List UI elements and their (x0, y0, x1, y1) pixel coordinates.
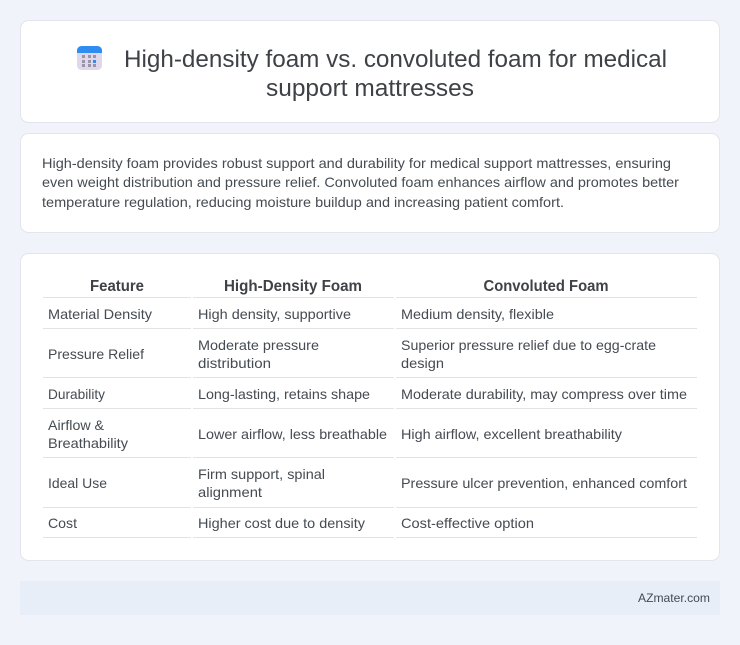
row: pressure relief: Moderate pressure (198, 337, 319, 353)
footer bar (20, 581, 720, 615)
row: cost: Cost (48, 515, 77, 531)
row: ideal use: Pressure ulcer prevention, enhanced comfort (401, 475, 687, 491)
row: pressure relief: distribution (198, 355, 271, 371)
icon: calendar (77, 46, 102, 70)
row: ideal use: Firm support, spinal (198, 466, 325, 482)
title text: support mattresses (266, 75, 474, 102)
row: ideal use: Ideal Use (48, 475, 107, 491)
row: pressure relief (48, 337, 656, 371)
row: pressure relief: Pressure Relief (48, 346, 144, 362)
row: durability: Durability (48, 386, 105, 402)
row: pressure relief: Superior pressure relief due to egg-crate (401, 337, 656, 353)
summary text: even weight distribution and pressure relief. Convoluted foam enhances airflow and promotes better (42, 174, 679, 190)
panel: comparison table (20, 254, 720, 560)
row: airflow and breathability: High airflow, excellent breathability (401, 426, 622, 442)
row: airflow and breathability: Breathability (48, 435, 128, 451)
row: durability: Long-lasting, retains shape (198, 386, 370, 402)
row: airflow and breathability (48, 417, 622, 451)
table header: Feature (90, 278, 144, 295)
row: ideal use (48, 466, 687, 500)
row: material density: High density, supportive (198, 306, 351, 322)
row: material density: Material Density (48, 306, 152, 322)
summary text: temperature regulation, reducing moisture buildup and increasing patient comfort. (42, 194, 564, 210)
row: durability (48, 386, 687, 402)
title text (124, 46, 667, 102)
row: pressure relief: design (401, 355, 444, 371)
row: cost (48, 515, 534, 531)
footer credit: AZmater.com (638, 591, 710, 605)
row: cost: Higher cost due to density (198, 515, 365, 531)
row: airflow and breathability: Lower airflow, less breathable (198, 426, 387, 442)
table header: Convoluted Foam (484, 278, 608, 295)
panel: summary (20, 134, 720, 232)
row: cost: Cost-effective option (401, 515, 534, 531)
summary text: High-density foam provides robust support and durability for medical support mattresses, ensuring (42, 155, 671, 171)
row: airflow and breathability: Airflow & (48, 417, 105, 433)
row: material density: Medium density, flexible (401, 306, 554, 322)
panel: title (20, 20, 720, 122)
row: durability: Moderate durability, may compress over time (401, 386, 687, 402)
row: material density (48, 306, 554, 322)
table header (90, 278, 608, 295)
summary text (42, 155, 679, 210)
table header: High-Density Foam (224, 278, 362, 295)
row: ideal use: alignment (198, 484, 262, 500)
title text: High-density foam vs. convoluted foam for medical (124, 46, 667, 73)
